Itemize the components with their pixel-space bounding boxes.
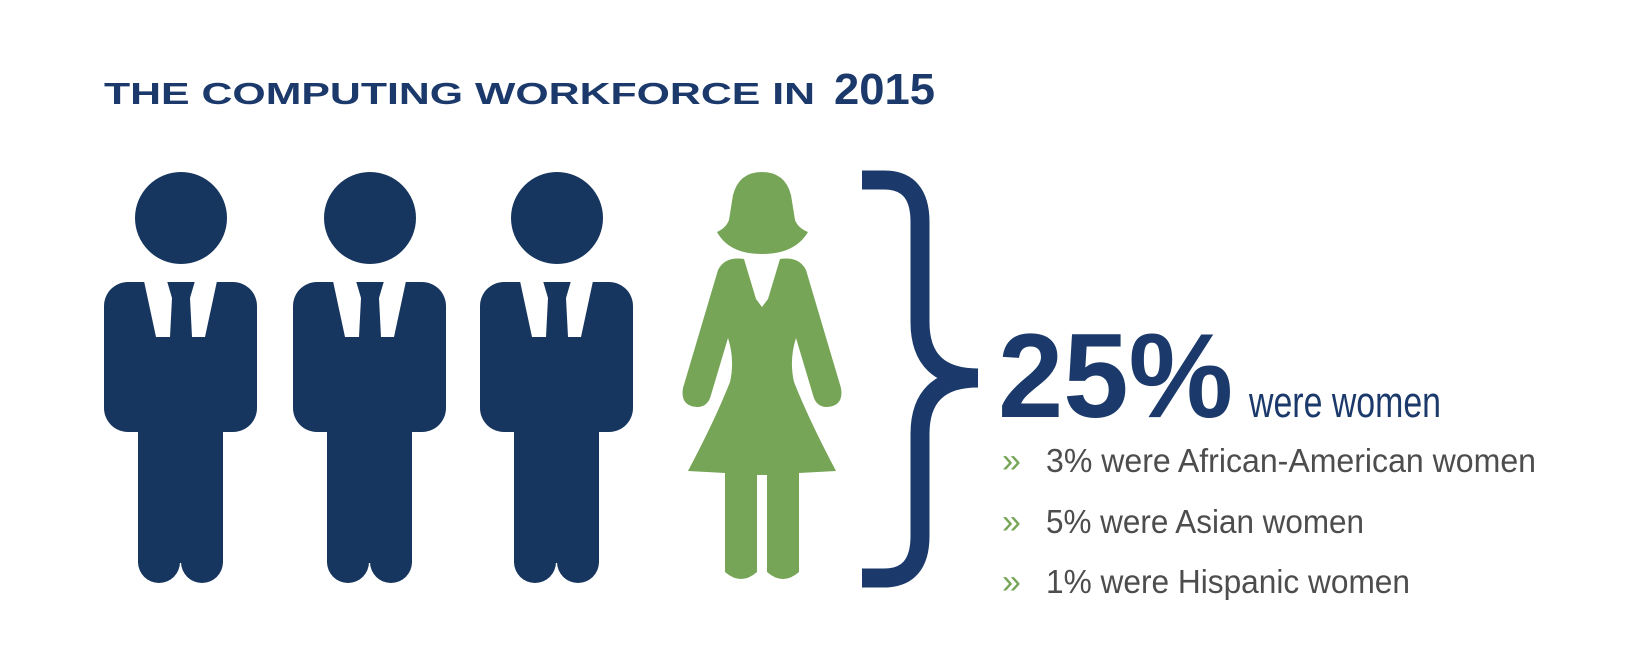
icon: man 1: [104, 172, 257, 583]
bullet list: [1002, 442, 1536, 601]
headline stat: 25%: [998, 309, 1233, 443]
icon: woman: [683, 172, 841, 579]
bullet 2: »: [1002, 503, 1021, 541]
bullet 1: 3% were African-American women: [1046, 442, 1536, 479]
icon: man 2: [293, 172, 446, 583]
bullet 1: »: [1002, 442, 1021, 480]
brace: [862, 180, 978, 578]
title: 2015: [834, 65, 935, 114]
bullet 3: »: [1002, 563, 1021, 601]
bullet 2: 5% were Asian women: [1046, 503, 1364, 540]
headline stat: were women: [1248, 378, 1441, 427]
icon: man 3: [480, 172, 633, 583]
bullet 3: 1% were Hispanic women: [1046, 563, 1410, 600]
title: THE COMPUTING WORKFORCE IN: [104, 76, 815, 111]
title: [104, 65, 935, 114]
headline stat: [998, 309, 1441, 443]
